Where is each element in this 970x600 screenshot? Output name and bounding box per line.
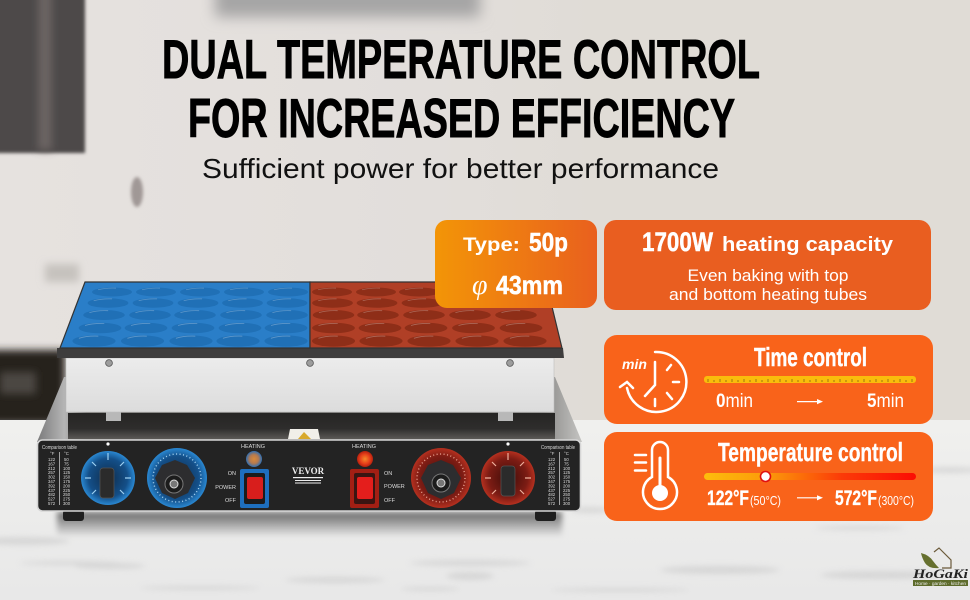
blurred kitchen background (0, 0, 970, 425)
left comparison table: °C (64, 451, 69, 456)
left comparison table: 347 (48, 479, 56, 484)
left comparison table (42, 445, 77, 506)
left comparison table: 275 (63, 497, 71, 502)
blue dimples (72, 288, 308, 347)
red power switch: ON (384, 471, 392, 477)
blue indicator lamp (241, 444, 265, 467)
right comparison table: 527 (548, 497, 556, 502)
screws (106, 360, 513, 366)
panel: type and diameter: Type: (463, 235, 520, 256)
warning label (288, 429, 320, 439)
left comparison table: 122 (48, 457, 56, 462)
upper body (66, 358, 554, 412)
time range labels: 5min (867, 391, 904, 412)
left comparison table: 50 (64, 457, 69, 462)
right comparison table: 150 (563, 475, 571, 480)
blue power switch: OFF (225, 498, 237, 504)
right comparison table: Comparison table (541, 445, 575, 451)
title (162, 28, 760, 149)
left comparison table: 482 (48, 492, 56, 497)
blue indicator lamp: HEATING (241, 444, 265, 450)
right comparison table: 125 (563, 470, 571, 475)
VEVOR nameplate: VEVOR (292, 466, 325, 476)
left comparison table: °F (50, 451, 55, 456)
HoGaKi logo: Home · garden · kitchen (915, 581, 967, 586)
griddle edge (57, 348, 564, 358)
right comparison table: °F (550, 451, 555, 456)
right comparison table: 257 (548, 470, 556, 475)
time ruler (704, 376, 916, 383)
panel: temperature control (604, 432, 933, 521)
panel: heating capacity: Even baking with top (688, 266, 848, 285)
waffle maker appliance (37, 282, 582, 521)
heading: Time control (754, 342, 867, 372)
left comparison table: 125 (63, 470, 71, 475)
right comparison table: 347 (548, 479, 556, 484)
red indicator lamp: HEATING (352, 444, 376, 450)
red temperature knob (411, 448, 471, 508)
red power switch (350, 469, 405, 508)
icon: clock (620, 352, 686, 412)
blue power switch: POWER (215, 485, 236, 491)
left comparison table: 392 (48, 483, 56, 488)
subtitle: Sufficient power for better performance (202, 153, 719, 184)
marble counter (0, 420, 970, 600)
icon: thermometer (635, 442, 677, 509)
support posts (106, 412, 513, 421)
temperature bar (704, 472, 916, 482)
panel: time control (604, 335, 933, 424)
left comparison table: 250 (63, 492, 71, 497)
temperature range labels (707, 487, 914, 510)
griddle plate blue half (60, 282, 310, 348)
right comparison table: 572 (548, 501, 556, 506)
left comparison table: 300 (63, 501, 71, 506)
right comparison table: 250 (563, 492, 571, 497)
panel: heating capacity: heating capacity (722, 234, 894, 256)
red power switch: POWER (384, 484, 405, 490)
panel: heating capacity: and bottom heating tubes (669, 285, 867, 304)
temperature range labels: 122°F (707, 487, 749, 510)
right comparison table: 50 (564, 457, 569, 462)
left comparison table: 225 (63, 488, 71, 493)
right comparison table: 275 (563, 497, 571, 502)
right comparison table: °C (564, 451, 569, 456)
temperature range labels: (50°C) (750, 493, 781, 508)
blue power switch (215, 469, 269, 508)
left comparison table: 302 (48, 475, 56, 480)
left comparison table: 167 (48, 461, 56, 466)
left comparison table: Comparison table (42, 445, 77, 451)
temperature range labels: 572°F (835, 487, 877, 510)
panel: type and diameter: φ (472, 270, 488, 301)
right comparison table: 100 (563, 466, 571, 471)
title: FOR INCREASED EFFICIENCY (188, 87, 735, 149)
right comparison table: 167 (548, 461, 556, 466)
feet (63, 510, 556, 521)
right comparison table: 75 (564, 461, 569, 466)
HoGaKi logo (912, 548, 969, 586)
left comparison table: 527 (48, 497, 56, 502)
griddle plate red half (310, 282, 562, 348)
left comparison table: 572 (48, 501, 56, 506)
HoGaKi logo: HoGaKi (912, 567, 969, 581)
panel: heating capacity: 1700W (642, 227, 713, 257)
left comparison table: 200 (63, 483, 71, 488)
blue power switch: ON (228, 471, 236, 477)
red indicator lamp (352, 444, 376, 467)
right comparison table: 392 (548, 483, 556, 488)
panel: type and diameter (435, 220, 597, 308)
right comparison table: 300 (563, 501, 571, 506)
panel: type and diameter: 43mm (496, 270, 563, 300)
blue timer knob (81, 442, 135, 505)
red dimples (312, 288, 547, 347)
control panel (38, 440, 580, 511)
icon: clock: min (622, 356, 647, 372)
right comparison table: 302 (548, 475, 556, 480)
red timer knob (481, 442, 535, 505)
time range labels (716, 391, 904, 412)
blue temperature knob (147, 448, 207, 508)
right comparison table: 122 (548, 457, 556, 462)
right comparison table: 200 (563, 483, 571, 488)
right comparison table: 225 (563, 488, 571, 493)
panel: heating capacity (604, 220, 931, 310)
left comparison table: 437 (48, 488, 56, 493)
right comparison table: 212 (548, 466, 556, 471)
red power switch: OFF (384, 498, 396, 504)
left comparison table: 212 (48, 466, 56, 471)
right comparison table: 175 (563, 479, 571, 484)
left comparison table: 100 (63, 466, 71, 471)
right comparison table: 482 (548, 492, 556, 497)
heading: Temperature control (718, 437, 903, 467)
left comparison table: 150 (63, 475, 71, 480)
left comparison table: 75 (64, 461, 69, 466)
left comparison table: 175 (63, 479, 71, 484)
time range labels: 0min (716, 391, 753, 412)
stainless base housing (37, 377, 582, 442)
temperature range labels: (300°C) (878, 493, 914, 508)
VEVOR nameplate (292, 466, 325, 484)
right comparison table (541, 445, 575, 506)
left comparison table: 257 (48, 470, 56, 475)
right comparison table: 437 (548, 488, 556, 493)
panel: type and diameter: 50p (529, 227, 568, 257)
